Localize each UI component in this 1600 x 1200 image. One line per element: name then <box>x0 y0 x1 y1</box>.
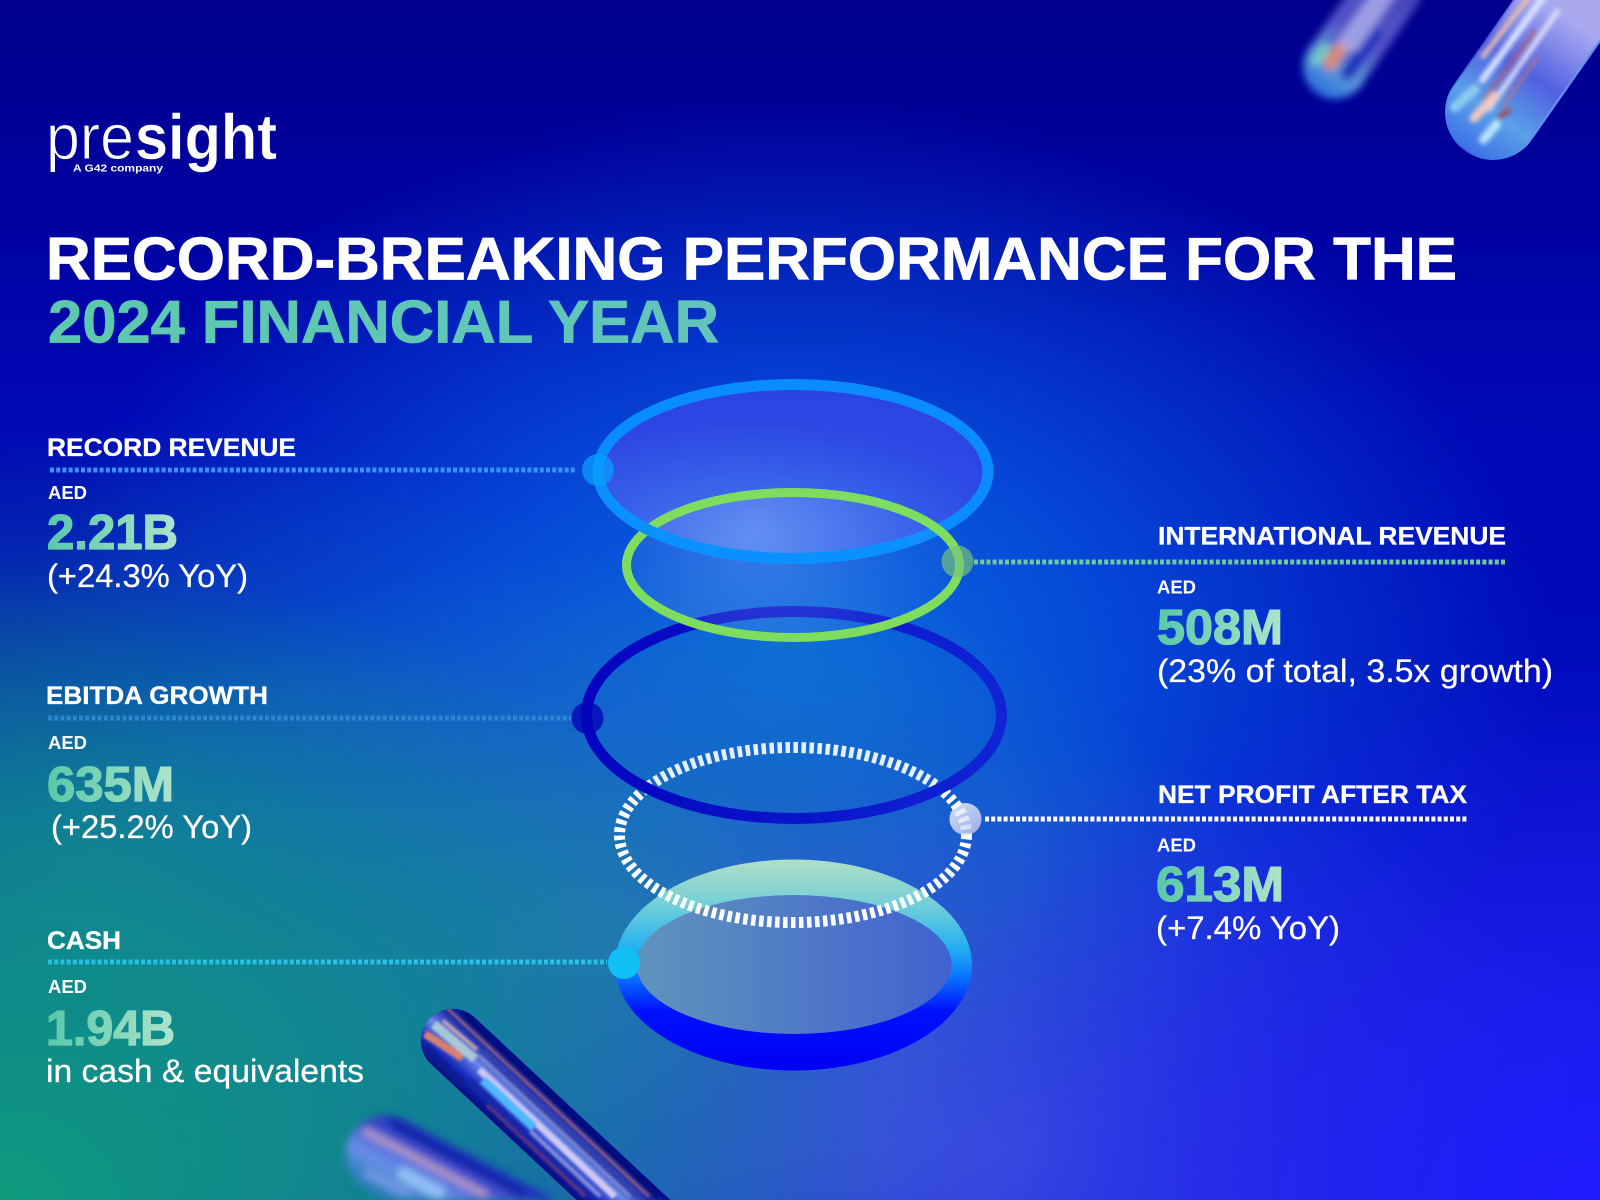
connector: net profit after tax <box>950 803 1467 835</box>
logo: presight: pre <box>46 101 134 173</box>
metric: cash <box>46 927 364 1089</box>
metric: cash: in cash & equivalents <box>46 1053 364 1089</box>
title: 2024 FINANCIAL YEAR <box>48 288 719 356</box>
ring 1: blue record revenue ring <box>598 384 988 558</box>
metric: record revenue: (+24.3% YoY) <box>47 558 248 594</box>
metric: international revenue: AED <box>1157 578 1196 598</box>
title <box>46 226 1457 356</box>
metric: cash: AED <box>48 977 87 997</box>
metric: net profit after tax: NET PROFIT AFTER TAX <box>1158 781 1467 809</box>
metric: cash: 1.94B <box>46 1002 175 1056</box>
title: RECORD-BREAKING PERFORMANCE FOR THE <box>46 226 1457 292</box>
connector: international revenue <box>942 546 1505 578</box>
metric: international revenue: INTERNATIONAL REVENUE <box>1158 522 1506 550</box>
metric: EBITDA growth: EBITDA GROWTH <box>46 682 268 710</box>
metric: EBITDA growth: AED <box>48 733 87 753</box>
logo: presight: sight <box>135 101 277 173</box>
decorative comet: top right small <box>1290 0 1436 112</box>
connector: EBITDA growth <box>48 702 604 734</box>
metric: EBITDA growth: (+25.2% YoY) <box>51 809 252 845</box>
metric: record revenue: AED <box>48 483 87 503</box>
metric: cash: CASH <box>47 927 121 955</box>
logo: presight: A G42 company <box>73 164 164 174</box>
ring 4: dashed white net profit ring <box>620 748 966 922</box>
connector: cash <box>48 947 640 979</box>
logo: presight <box>46 101 277 174</box>
metric: record revenue <box>47 434 296 594</box>
metric: net profit after tax: 613M <box>1156 858 1284 912</box>
ring 2: green international revenue ring <box>626 492 960 638</box>
metric: record revenue: 2.21B <box>47 506 178 560</box>
metric: international revenue <box>1157 522 1553 689</box>
metric: EBITDA growth: 635M <box>47 758 174 812</box>
decorative comet: top right large <box>1445 0 1600 160</box>
metric: net profit after tax: (+7.4% YoY) <box>1156 910 1340 946</box>
metric: EBITDA growth <box>46 682 268 845</box>
decorative comet: bottom sharp <box>421 1008 670 1200</box>
metric: net profit after tax <box>1156 781 1467 946</box>
ring 3: dark blue EBITDA ring <box>586 612 1002 818</box>
connector: record revenue <box>50 454 614 486</box>
metric: international revenue: 508M <box>1157 601 1283 655</box>
metric: record revenue: RECORD REVENUE <box>47 434 296 462</box>
metric: international revenue: (23% of total, 3.5x growth) <box>1157 653 1553 689</box>
ring 5: thick cash ring <box>615 860 972 1070</box>
decorative comet: bottom blurred <box>346 1115 555 1200</box>
ring 1 front arc crossing over ring 2 <box>594 484 910 564</box>
metric: net profit after tax: AED <box>1157 836 1196 856</box>
